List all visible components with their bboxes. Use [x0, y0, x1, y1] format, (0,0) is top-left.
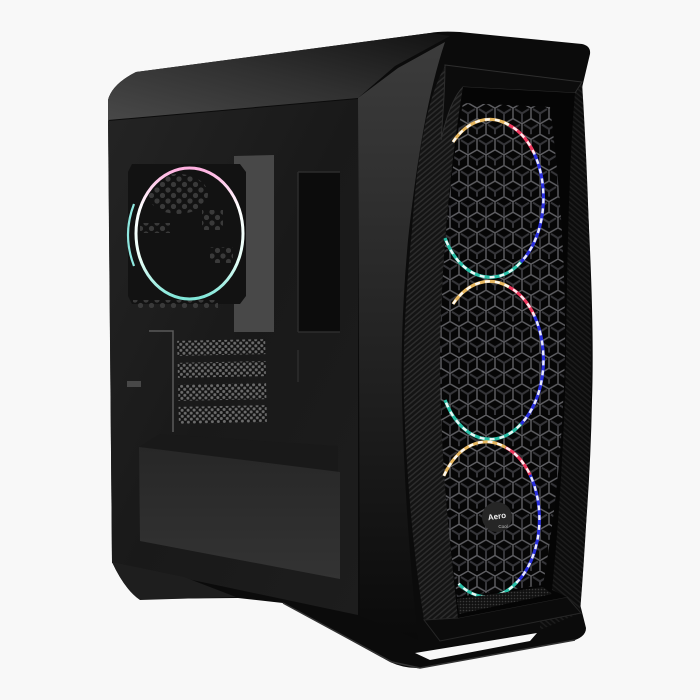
logo badge — [482, 502, 512, 532]
PCIe slot covers — [177, 339, 267, 424]
logo badge: Aero — [487, 511, 507, 522]
rear fan RGB ring — [136, 168, 243, 299]
front inner bezel — [440, 87, 575, 618]
left foot — [112, 562, 236, 600]
base highlight — [283, 603, 575, 668]
middle fan ring — [445, 281, 543, 439]
logo badge: Cool — [498, 524, 508, 529]
glass side window — [108, 99, 358, 615]
case silhouette — [108, 32, 593, 668]
rear connector — [127, 381, 141, 387]
front carbon fibre strip left — [404, 66, 470, 640]
bottom fan ring — [444, 442, 539, 597]
shroud top vent — [139, 434, 338, 472]
lower front vent — [457, 587, 552, 614]
motherboard tray cut-out — [298, 172, 340, 332]
front bottom band — [424, 597, 581, 641]
front mesh panel with fans — [440, 103, 565, 597]
front carbon fibre strip right — [540, 82, 591, 630]
side panel — [358, 42, 445, 640]
fan vent dots — [133, 174, 233, 308]
rear exhaust fan frame — [128, 164, 246, 304]
PSU shroud — [139, 447, 340, 579]
grey cable cover — [234, 155, 274, 332]
front top band — [441, 65, 582, 140]
top panel — [108, 33, 450, 120]
honeycomb mesh — [440, 103, 565, 597]
rear bracket line — [149, 331, 173, 432]
base slot cut-out — [415, 633, 537, 660]
internal tray edges — [298, 172, 340, 382]
left fan outer arc — [128, 204, 134, 266]
top fan ring — [445, 119, 543, 277]
